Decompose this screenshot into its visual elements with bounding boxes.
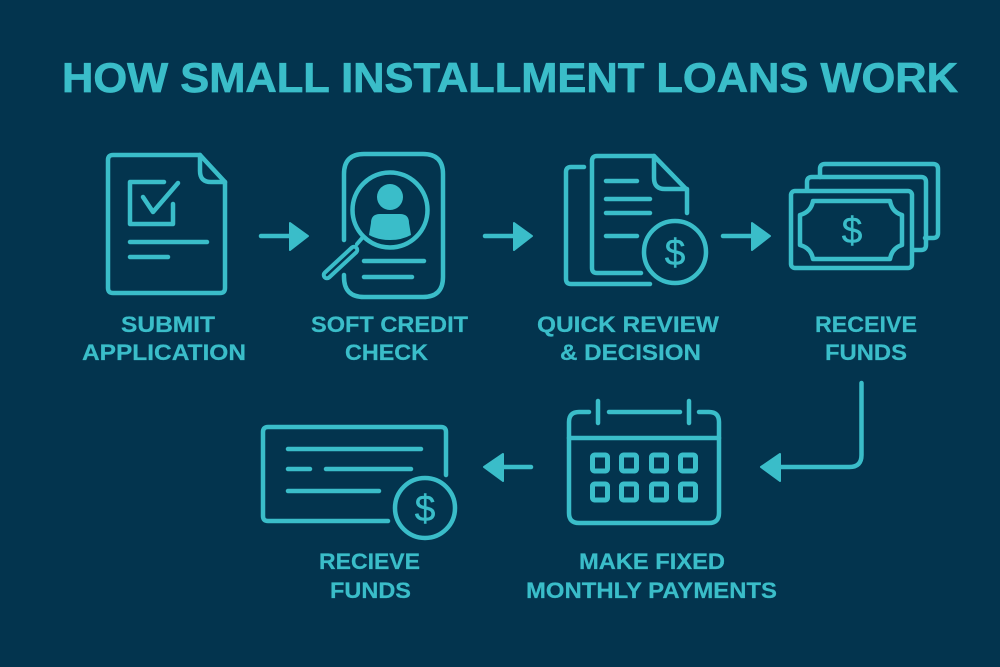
label: recieve funds — [319, 549, 420, 603]
label: quick review and decision: QUICK REVIEW — [537, 312, 720, 337]
label: make fixed monthly payments: MAKE FIXED — [579, 549, 725, 574]
icon detail: dollar sign: $ — [665, 232, 685, 273]
label: recieve funds: RECIEVE — [319, 549, 420, 574]
label: submit application: SUBMIT — [121, 312, 215, 337]
label: make fixed monthly payments — [526, 549, 777, 603]
calendar date cells — [592, 455, 696, 500]
label: recieve funds: FUNDS — [330, 578, 411, 603]
icon detail: person silhouette — [369, 184, 411, 240]
arrow: elbow from step 4 down to step 5 — [761, 383, 862, 481]
label: soft credit check: SOFT CREDIT — [311, 312, 468, 337]
icon: calendar — [569, 401, 719, 523]
icon: review documents with dollar coin — [566, 156, 706, 284]
label: make fixed monthly payments: MONTHLY PAYMENTS — [526, 578, 777, 603]
label: receive funds: RECEIVE — [815, 312, 917, 337]
icon: payment statement with dollar coin — [263, 427, 455, 538]
arrow: step 3 to 4 — [723, 223, 770, 250]
icon detail: dollar sign on banknote: $ — [842, 210, 862, 251]
label: submit application: APPLICATION — [82, 340, 246, 365]
label: submit application — [82, 312, 246, 365]
icon detail: dollar sign on coin: $ — [415, 488, 435, 529]
arrow: step 5 to 6 — [484, 454, 531, 481]
label: receive funds — [815, 312, 917, 365]
title: HOW SMALL INSTALLMENT LOANS WORK — [62, 54, 958, 101]
icon: stack of banknotes — [791, 164, 938, 268]
label: soft credit check: CHECK — [345, 340, 429, 365]
label: receive funds: FUNDS — [825, 340, 907, 365]
arrow: step 1 to 2 — [261, 223, 308, 250]
label: quick review and decision: & DECISION — [560, 340, 701, 365]
label: soft credit check — [311, 312, 468, 365]
icon: application document with checkbox — [108, 155, 225, 293]
icon: soft credit check magnifier — [327, 154, 443, 297]
arrow: step 2 to 3 — [485, 223, 532, 250]
label: quick review and decision — [537, 312, 720, 365]
